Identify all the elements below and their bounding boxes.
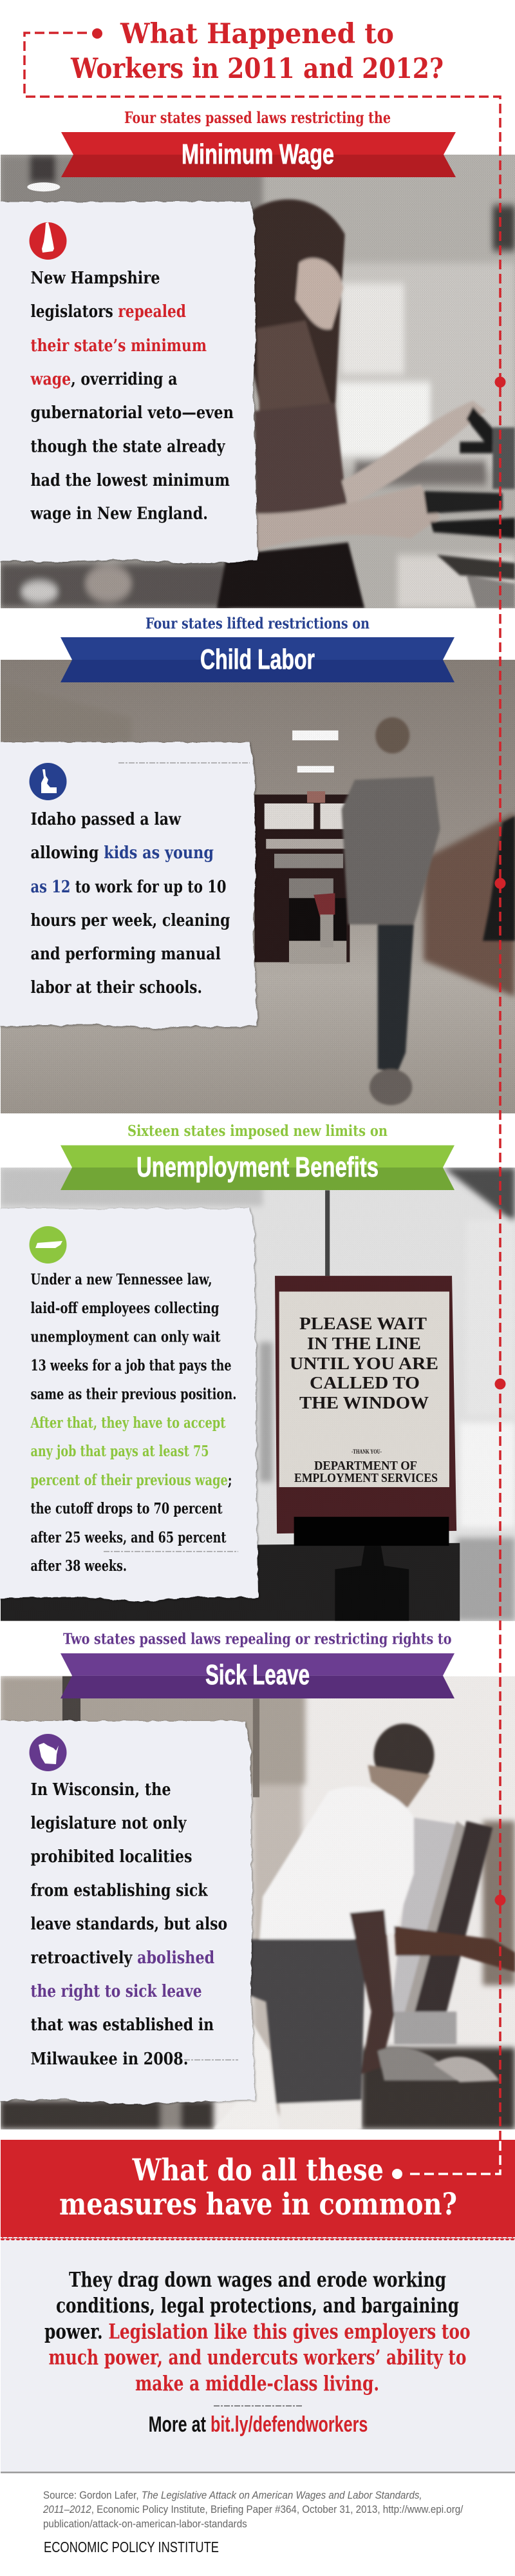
sign text: UNTIL YOU ARE <box>290 1354 438 1373</box>
body text: Under a new Tennessee law, <box>31 1271 212 1289</box>
sign text: -THANK YOU- <box>351 1448 382 1455</box>
section: child labor <box>0 615 515 1113</box>
body text: after 38 weeks. <box>31 1557 127 1575</box>
body text: gubernatorial veto—even <box>31 403 234 423</box>
source note: publication/attack-on-american-labor-standards <box>43 2518 247 2530</box>
sign text: EMPLOYMENT SERVICES <box>294 1471 438 1485</box>
photo: school hallway <box>0 660 515 1113</box>
organization name: ECONOMIC POLICY INSTITUTE <box>44 2539 219 2555</box>
body text: same as their previous position. <box>31 1385 237 1403</box>
section: sick leave <box>0 1631 515 2129</box>
body text: after 25 weeks, and 65 percent <box>31 1529 227 1546</box>
subheading: Four states lifted restrictions on <box>145 615 370 633</box>
body text: leave standards, but also <box>31 1915 227 1934</box>
title: Workers in 2011 and 2012? <box>70 53 444 85</box>
body text: hours per week, cleaning <box>31 911 230 930</box>
body text: unemployment can only wait <box>31 1329 221 1346</box>
body text: percent of their previous wage; <box>31 1472 232 1489</box>
sign text <box>290 1314 438 1485</box>
icon: Wisconsin <box>30 1734 67 1771</box>
paper panel <box>0 742 258 1028</box>
photo: barista <box>0 155 515 608</box>
body text <box>30 1271 236 1575</box>
icon: Tennessee <box>30 1226 67 1264</box>
body text: any job that pays at least 75 <box>31 1443 209 1460</box>
body text: 13 weeks for a job that pays the <box>31 1357 232 1374</box>
section: minimum wage <box>0 108 515 608</box>
ribbon banner <box>61 1653 454 1698</box>
paper panel <box>0 1721 255 2104</box>
icon: New Hampshire <box>30 222 67 260</box>
conclusion text <box>44 2267 471 2396</box>
body text: legislators repealed <box>31 302 186 322</box>
body text: labor at their schools. <box>31 978 202 997</box>
body text: New Hampshire <box>31 269 160 288</box>
body text: had the lowest minimum <box>31 471 230 490</box>
body text: the right to sick leave <box>31 1982 202 2001</box>
source note: 2011–2012, Economic Policy Institute, Briefing Paper #364, October 31, 2013, http://www.epi.org/ <box>42 2503 464 2515</box>
body text: prohibited localities <box>31 1847 192 1867</box>
red heading panel: measures have in common? <box>59 2187 457 2222</box>
body text: that was established in <box>31 2015 214 2035</box>
ribbon banner <box>61 637 454 682</box>
red heading panel: What do all these <box>132 2153 384 2188</box>
body text: legislature not only <box>31 1814 187 1833</box>
photo: waiting sign <box>0 1168 515 1621</box>
body text <box>30 269 234 523</box>
photo: dishwasher <box>0 1677 515 2129</box>
body text: In Wisconsin, the <box>31 1780 171 1800</box>
body text <box>31 1780 227 2069</box>
subheading: Sixteen states imposed new limits on <box>127 1122 388 1140</box>
sign text: PLEASE WAIT <box>299 1314 427 1333</box>
source note: Source: Gordon Lafer, The Legislative Attack on American Wages and Labor Standards, <box>43 2489 422 2501</box>
body text: Idaho passed a law <box>31 810 182 829</box>
source note <box>42 2489 464 2530</box>
ribbon banner <box>61 1146 454 1190</box>
dashed connector line <box>24 28 506 2179</box>
ribbon banner <box>61 132 456 177</box>
body text: Milwaukee in 2008. <box>31 2050 188 2069</box>
red heading panel <box>1 2140 515 2240</box>
body text: the cutoff drops to 70 percent <box>31 1500 223 1517</box>
body text: After that, they have to accept <box>30 1414 226 1432</box>
ribbon banner: Unemployment Benefits <box>136 1151 379 1183</box>
icon: Idaho <box>30 763 67 800</box>
sign text: THE WINDOW <box>299 1393 429 1412</box>
sign text: CALLED TO <box>310 1373 420 1392</box>
body text <box>31 810 230 997</box>
body text: wage, overriding a <box>30 370 178 389</box>
body text: allowing kids as young <box>31 843 214 863</box>
paper background <box>1 2236 515 2472</box>
body text: and performing manual <box>31 945 221 964</box>
body text: laid-off employees collecting <box>31 1300 219 1317</box>
body text: from establishing sick <box>31 1881 208 1901</box>
paper panel <box>0 202 258 563</box>
ribbon banner: Sick Leave <box>205 1659 310 1691</box>
body text: though the state already <box>31 437 225 456</box>
ribbon banner: Minimum Wage <box>182 139 334 170</box>
title: What Happened to <box>120 18 394 50</box>
call to action: More at bit.ly/defendworkers <box>149 2412 368 2437</box>
title <box>70 18 444 85</box>
panel: conclusion <box>1 2140 515 2473</box>
conclusion text: make a middle-class living. <box>135 2371 379 2396</box>
subheading: Four states passed laws restricting the <box>124 108 391 127</box>
ribbon banner: Child Labor <box>200 644 315 675</box>
body text: wage in New England. <box>30 504 208 523</box>
connector dots <box>92 28 506 1906</box>
body text: their state’s minimum <box>31 336 207 356</box>
sign text: DEPARTMENT OF <box>314 1459 417 1473</box>
body text: as 12 to work for up to 10 <box>31 878 227 897</box>
sign text: IN THE LINE <box>307 1334 421 1353</box>
section: unemployment benefits <box>0 1122 515 1621</box>
paper panel <box>0 1209 258 1602</box>
body text: retroactively abolished <box>31 1948 214 1968</box>
